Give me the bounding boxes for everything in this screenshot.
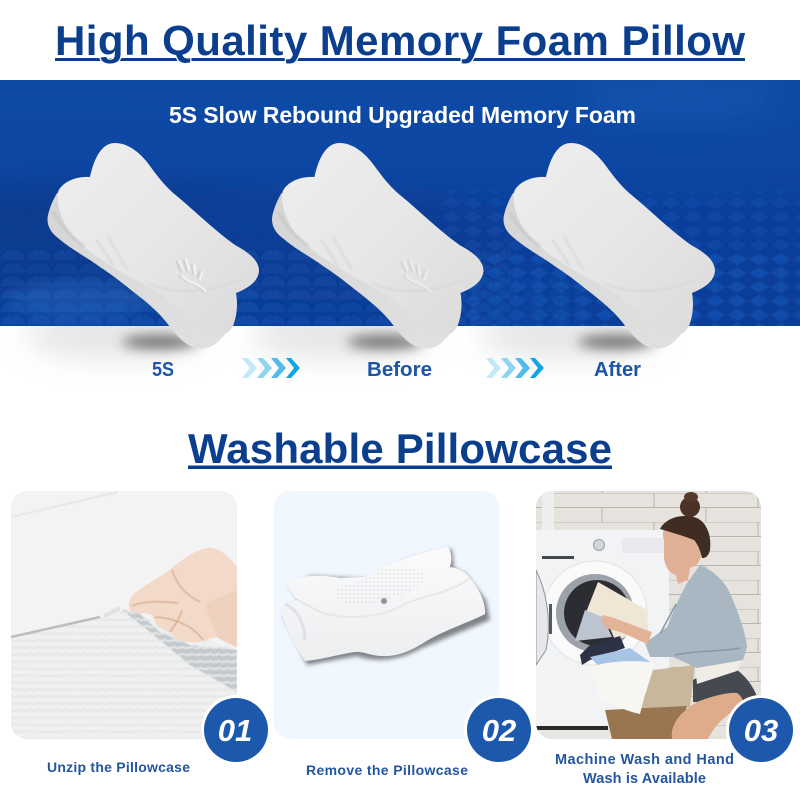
heading: Washable Pillowcase: Washable Pillowcase — [188, 425, 612, 472]
badge: 03 — [726, 695, 796, 765]
zipper flap shadow — [122, 610, 237, 692]
caption: unzip: Unzip the Pillowcase — [47, 759, 190, 775]
badge: 01 — [201, 695, 271, 765]
caption: machine wash: Wash is Available — [583, 771, 706, 787]
badge: 02 — [464, 695, 534, 765]
arrow: chevrons one — [242, 358, 300, 378]
badge: 03: 03 — [744, 713, 778, 748]
woman — [602, 492, 757, 739]
badge: 01: 01 — [218, 713, 252, 748]
panel: removed pillowcase — [274, 491, 499, 739]
icon: bare contour pillow — [282, 547, 490, 665]
caption: remove: Remove the Pillowcase — [306, 762, 468, 778]
laundry — [575, 582, 650, 668]
arrow: chevrons two — [486, 358, 544, 378]
pillow: before — [272, 143, 484, 348]
icon: hand — [129, 548, 237, 647]
panel: laundry photo — [536, 491, 761, 739]
label: After: After — [594, 359, 641, 381]
pillow: after — [503, 143, 715, 348]
pillow: 5S — [47, 143, 259, 348]
caption: machine wash: Machine Wash and Hand — [555, 752, 734, 768]
label: 5S: 5S — [152, 359, 174, 381]
floor shadows — [28, 326, 662, 366]
title: High Quality Memory Foam Pillow: High Quality Memory Foam Pillow — [55, 17, 745, 64]
basket — [590, 661, 695, 739]
panel: memory foam blue band — [0, 80, 800, 326]
subtitle: slow rebound: 5S Slow Rebound Upgraded Memory Foam — [169, 102, 636, 128]
caption: machine wash — [555, 752, 734, 787]
panel: unzip photo — [11, 491, 237, 739]
washing machine — [536, 530, 669, 739]
label: Before: Before — [367, 359, 432, 381]
badge: 02: 02 — [482, 713, 516, 748]
